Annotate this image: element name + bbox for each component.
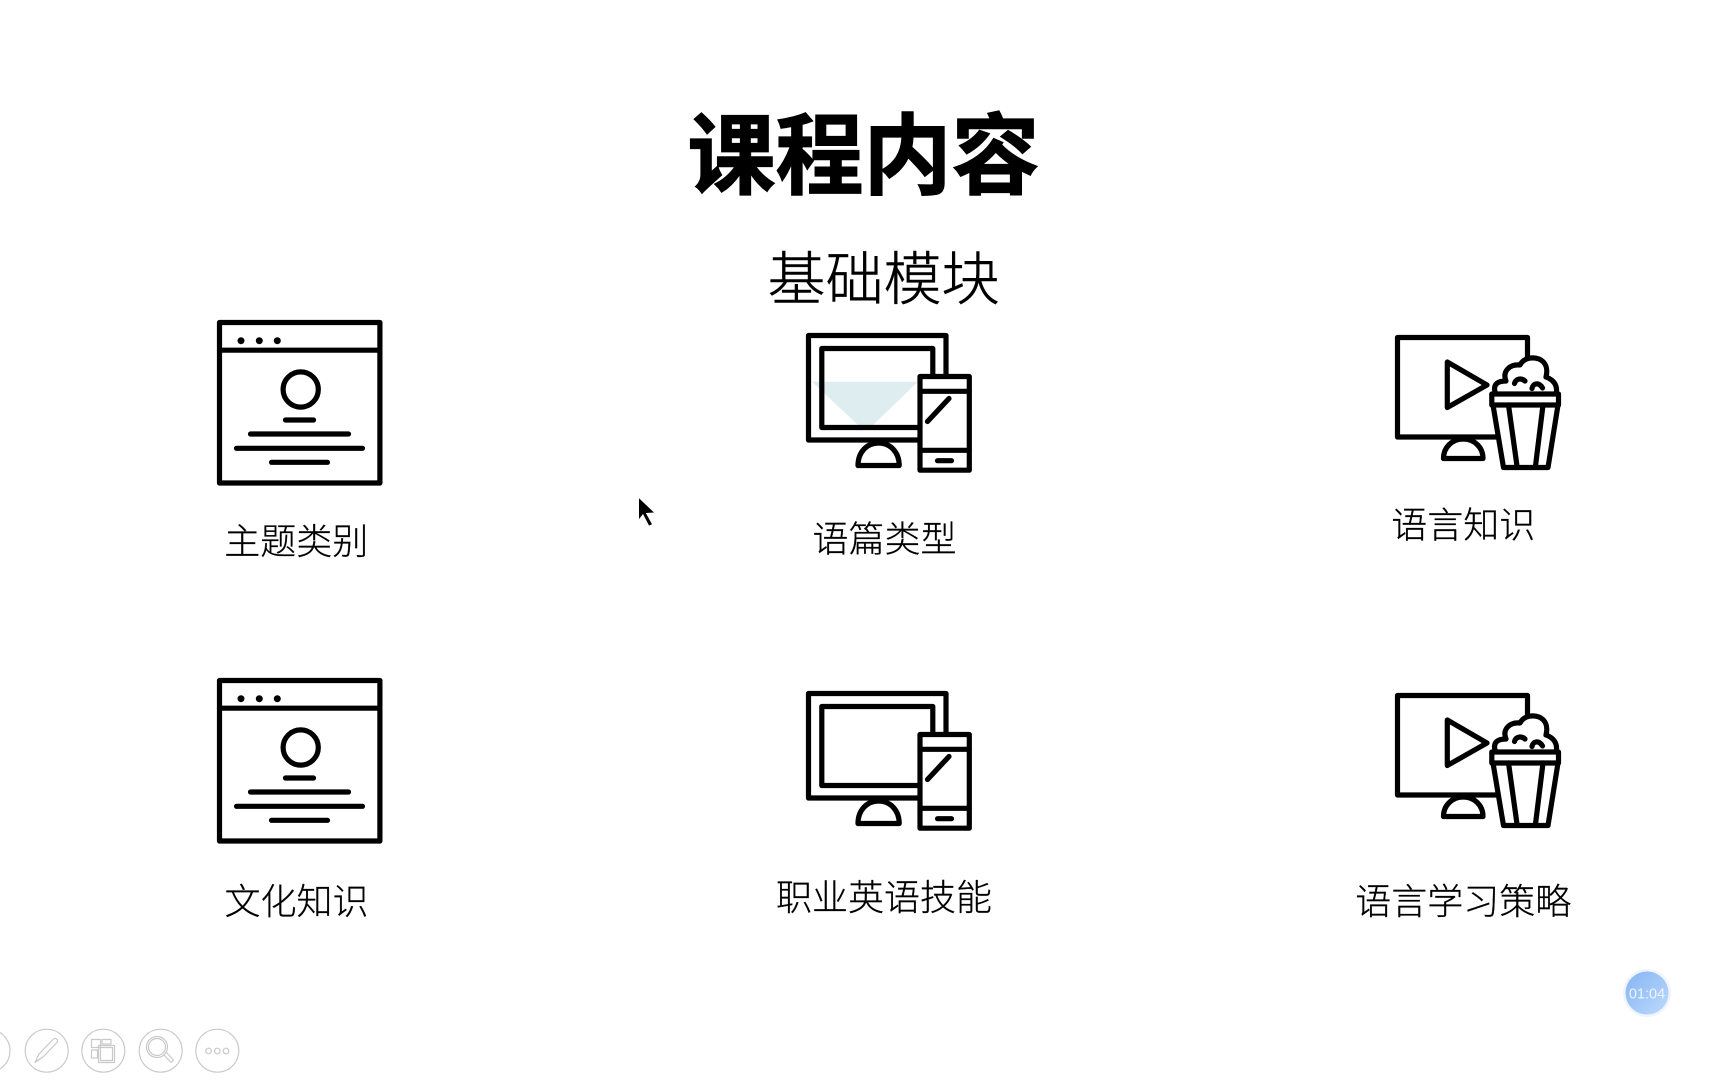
toolbar button: more (196, 1029, 239, 1072)
label: 文化知识: 文化知识 (224, 881, 369, 922)
panel: 文化知识 (220, 680, 380, 922)
timer badge: 01:04 (1629, 986, 1665, 1002)
label: 主题类别: 主题类别 (224, 521, 368, 562)
panel: 主题类别 (220, 322, 380, 562)
icon: video screen and popcorn (1398, 696, 1558, 826)
icon: web page profile (220, 322, 380, 483)
icon: monitor and phone (808, 694, 969, 828)
timer badge (1623, 969, 1671, 1017)
icon: mouse cursor (639, 498, 654, 526)
toolbar button: pen (25, 1029, 68, 1072)
toolbar button: magnifier (139, 1029, 182, 1072)
icon: video screen and popcorn (1398, 338, 1558, 468)
title: 课程内容 (687, 107, 1040, 206)
panel: 语言学习策略 (1355, 696, 1571, 922)
panel: 语言知识 (1391, 338, 1558, 546)
label: 语言学习策略: 语言学习策略 (1355, 881, 1571, 922)
toolbar button: partial circle (0, 1029, 10, 1072)
label: 语言知识: 语言知识 (1391, 504, 1535, 546)
presentation toolbar (0, 1029, 239, 1072)
icon: web page profile (220, 680, 380, 841)
panel: 语篇类型 (808, 336, 969, 560)
panel: 职业英语技能 (776, 694, 992, 918)
icon: monitor and phone with teal highlight (808, 336, 969, 470)
label: 职业英语技能: 职业英语技能 (776, 877, 992, 918)
label: 语篇类型: 语篇类型 (812, 518, 957, 560)
subtitle: 基础模块 (767, 248, 1000, 312)
toolbar button: slides (82, 1029, 125, 1072)
